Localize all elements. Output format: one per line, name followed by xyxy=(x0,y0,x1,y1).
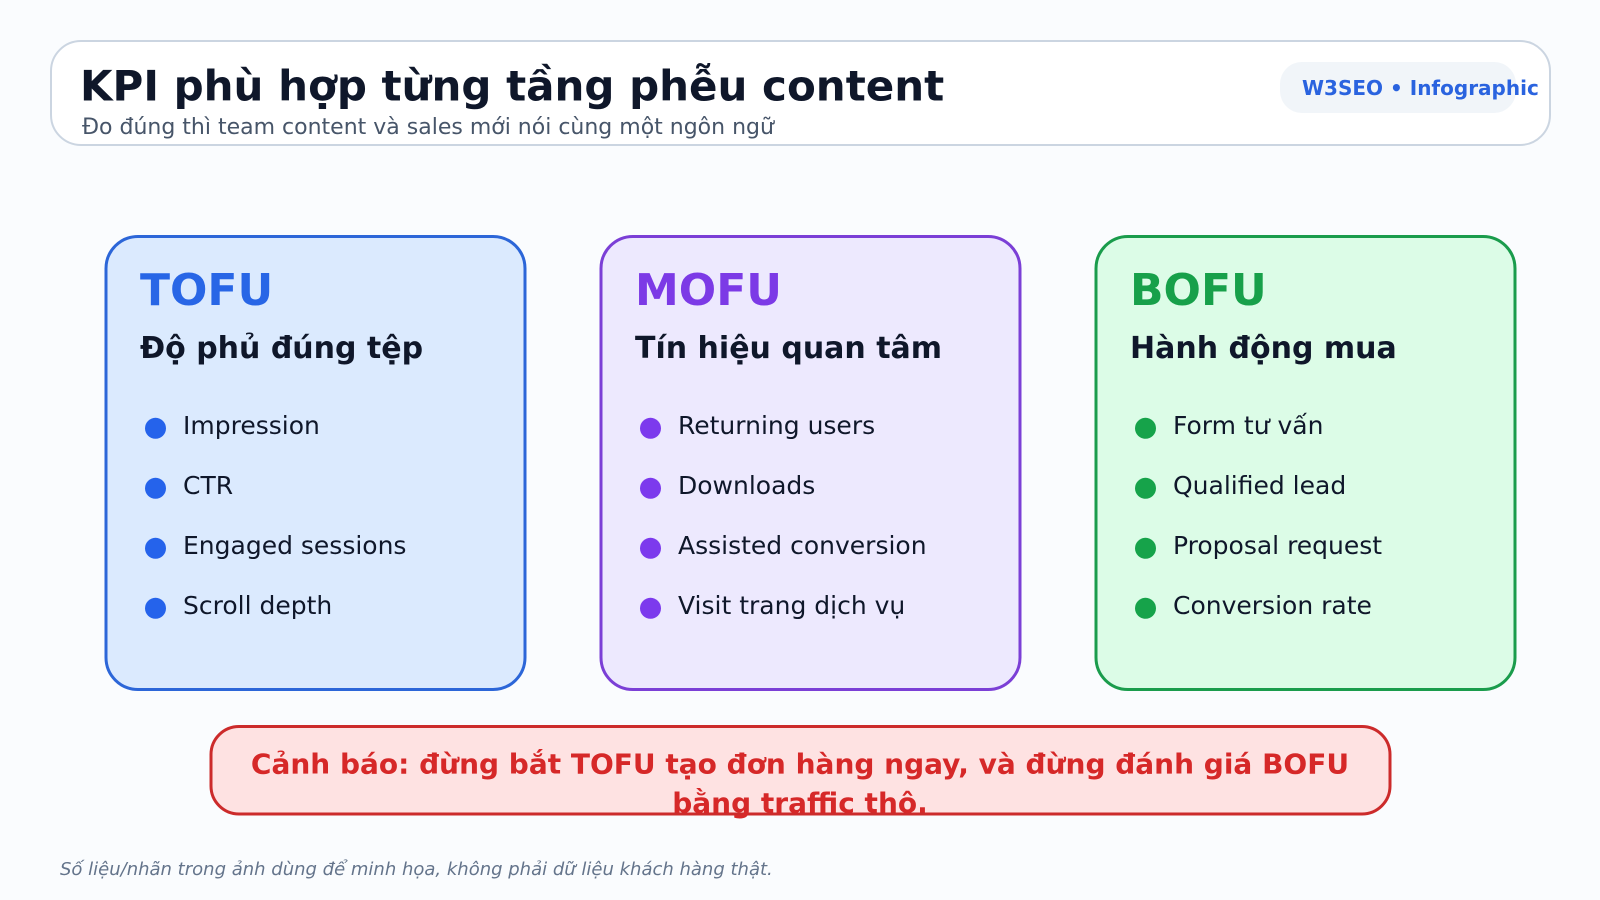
MOFU heading: MOFU xyxy=(635,265,782,316)
BOFU KPI list xyxy=(1135,411,1382,620)
BOFU heading: BOFU xyxy=(1130,265,1267,316)
MOFU subheading: Tín hiệu quan tâm xyxy=(635,331,942,366)
MOFU KPI list: Returning users xyxy=(678,411,875,440)
header panel xyxy=(51,41,1550,145)
warning callout: Cảnh báo: đừng bắt TOFU tạo đơn hàng ngay, và đừng đánh giá BOFU xyxy=(251,748,1349,780)
TOFU KPI list: Impression xyxy=(183,411,320,440)
TOFU subheading: Độ phủ đúng tệp xyxy=(140,331,423,366)
TOFU KPI list: CTR xyxy=(183,471,233,500)
MOFU KPI list: Visit trang dịch vụ xyxy=(678,591,905,620)
MOFU KPI list xyxy=(640,411,927,620)
BOFU subheading: Hành động mua xyxy=(1130,331,1397,366)
badge xyxy=(1280,62,1539,113)
BOFU KPI list: Form tư vấn xyxy=(1173,411,1323,440)
title: KPI phù hợp từng tầng phễu content xyxy=(80,62,944,110)
warning callout: bằng traffic thô. xyxy=(672,786,928,820)
badge: W3SEO • Infographic xyxy=(1302,76,1539,100)
TOFU KPI list xyxy=(145,411,406,620)
footnote: Số liệu/nhãn trong ảnh dùng để minh họa, không phải dữ liệu khách hàng thật. xyxy=(60,859,773,880)
BOFU KPI list: Qualified lead xyxy=(1173,471,1346,500)
BOFU KPI list: Proposal request xyxy=(1173,531,1382,560)
warning callout xyxy=(211,726,1390,820)
MOFU KPI list: Assisted conversion xyxy=(678,531,927,560)
panel: MOFU xyxy=(601,236,1020,690)
panel: BOFU xyxy=(1096,236,1515,690)
BOFU KPI list: Conversion rate xyxy=(1173,591,1372,620)
MOFU KPI list: Downloads xyxy=(678,471,815,500)
TOFU KPI list: Scroll depth xyxy=(183,591,332,620)
subtitle: Đo đúng thì team content và sales mới nói cùng một ngôn ngữ xyxy=(82,115,775,140)
panel: TOFU xyxy=(106,236,525,690)
TOFU heading: TOFU xyxy=(140,265,273,316)
TOFU KPI list: Engaged sessions xyxy=(183,531,406,560)
